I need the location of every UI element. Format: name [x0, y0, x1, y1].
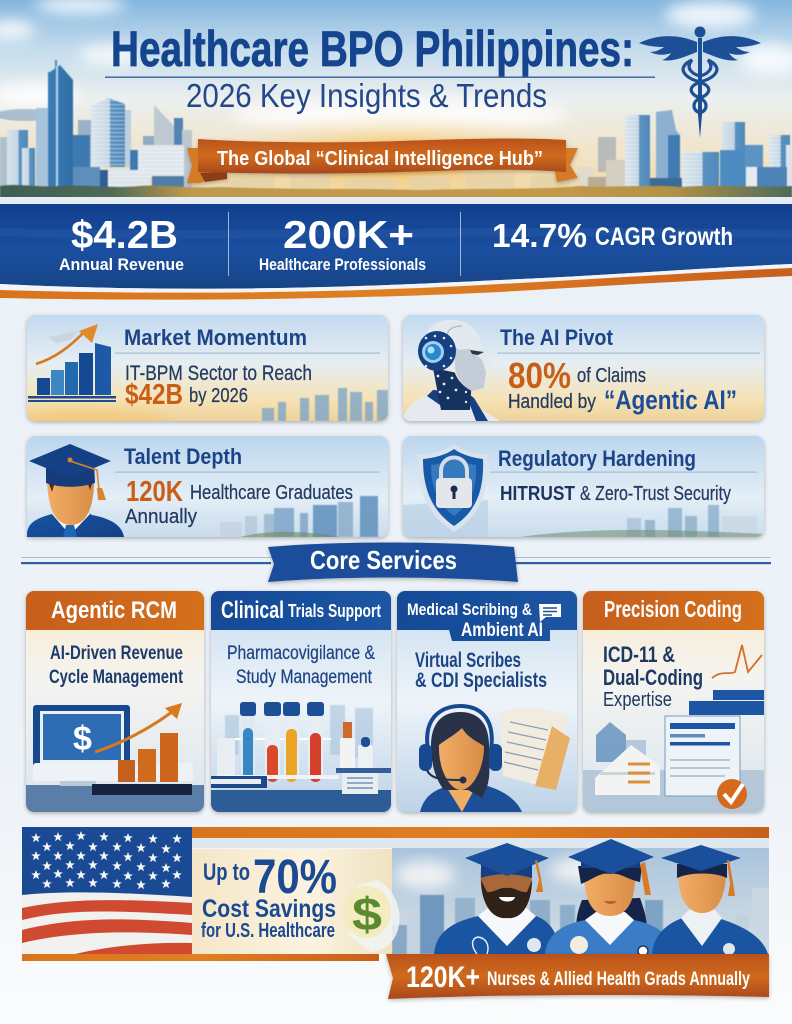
title divider: [105, 76, 655, 78]
stat: CAGR growth: 14.7%: [492, 217, 587, 254]
ribbon: nurses and allied health grads: 120K+: [406, 961, 480, 994]
panel: regulatory hardening: [403, 436, 764, 537]
stat: healthcare professionals: Healthcare Professionals: [259, 256, 426, 274]
card header: [26, 591, 204, 630]
text: cost savings: Up to: [203, 859, 250, 886]
illustration: scribe with headset: [419, 706, 570, 812]
stat: healthcare professionals: 200K+: [283, 214, 414, 257]
card text: [49, 643, 184, 688]
stat: CAGR growth: CAGR Growth: [595, 223, 733, 251]
tree line: [0, 184, 792, 197]
text: sector value: IT-BPM Sector to Reach: [125, 362, 312, 385]
stat: annual revenue: $4.2B: [71, 214, 178, 257]
right skyline: [578, 110, 792, 192]
icon: shield with lock: [418, 444, 487, 532]
card text: [227, 643, 375, 688]
icon: dollar coin: [343, 880, 400, 952]
text: healthcare graduates: [125, 476, 353, 528]
service card: medical scribing and ambient AI: Medical Scribing &: [407, 600, 532, 619]
card text: Virtual Scribes: [415, 649, 521, 672]
text: sector value: [125, 362, 312, 411]
text: cost savings: 70%: [253, 851, 337, 904]
icon: dollar coin: $: [352, 888, 382, 940]
card header: [583, 591, 764, 630]
text: security: & Zero-Trust Security: [580, 483, 731, 505]
text: claims handled by agentic AI: of Claims: [577, 365, 646, 387]
ribbon text: The Global “Clinical Intelligence Hub”: [217, 148, 543, 170]
card text: Cycle Management: [49, 667, 184, 688]
heading: Regulatory Hardening: [498, 446, 696, 471]
illustration: monitor and growth chart: $: [73, 720, 92, 758]
figure: graduate man: [652, 845, 768, 955]
card header: [397, 591, 577, 641]
card text: Study Management: [236, 667, 373, 688]
text: cost savings: Cost Savings: [202, 895, 336, 923]
stats band: [0, 204, 792, 300]
panel: market momentum: [24, 314, 390, 425]
service card: medical scribing and ambient AI: Ambient AI: [461, 620, 543, 641]
service card: medical scribing and ambient AI: [397, 591, 577, 812]
figure: graduate woman: [545, 839, 662, 954]
title: Healthcare BPO Philippines:: [111, 21, 634, 77]
card text: Dual-Coding: [603, 665, 703, 690]
service card: agentic RCM: [26, 591, 204, 812]
stat: healthcare professionals: [259, 214, 426, 274]
service card: clinical trials support: Clinical: [221, 597, 284, 624]
text: sector value: $42B: [125, 379, 183, 411]
card text: Pharmacovigilance &: [227, 643, 375, 664]
stat: annual revenue: Annual Revenue: [59, 256, 184, 274]
heading ribbon: core services: [268, 542, 518, 582]
ribbon: nurses and allied health grads: [386, 954, 769, 999]
stat: annual revenue: [59, 214, 184, 274]
text: claims handled by agentic AI: 80%: [508, 355, 571, 396]
text: claims handled by agentic AI: [508, 355, 737, 415]
figure: graduate man with beard: [434, 843, 560, 954]
heading: Market Momentum: [124, 325, 307, 350]
header: sky and city skyline: [0, 0, 792, 208]
panel: talent depth: [27, 436, 388, 537]
text: claims handled by agentic AI: “Agentic AI”: [604, 385, 737, 415]
hazy centre buildings: [225, 172, 570, 190]
text: cost savings: [201, 851, 337, 942]
card text: [415, 649, 547, 692]
card text: & CDI Specialists: [415, 669, 547, 692]
subtitle: 2026 Key Insights & Trends: [186, 77, 547, 114]
orange bottom stripe: [22, 954, 379, 961]
text: healthcare graduates: Healthcare Graduates: [190, 482, 353, 504]
text: healthcare graduates: Annually: [125, 506, 197, 528]
text: security: HITRUST: [500, 483, 575, 505]
illustration: monitor and growth chart: [26, 703, 204, 812]
icon: graduate: [27, 444, 124, 537]
icon: robot head: [403, 320, 500, 421]
text: healthcare graduates: 120K: [126, 476, 183, 508]
header bottom rule: [0, 197, 792, 204]
card text: AI-Driven Revenue: [50, 643, 183, 664]
icon: rising bar chart: [28, 324, 116, 402]
heading: Talent Depth: [124, 444, 242, 469]
icon: caduceus: [639, 26, 761, 138]
panel: the AI pivot: [403, 315, 764, 421]
heading: The AI Pivot: [500, 325, 614, 350]
left skyline: [0, 60, 192, 190]
service card: clinical trials support: Trials Support: [288, 601, 381, 621]
card text: [603, 642, 703, 711]
text: claims handled by agentic AI: Handled by: [508, 391, 596, 413]
illustration: coding documents: [583, 645, 764, 812]
panel: cost savings: [192, 849, 392, 954]
section divider lines: [21, 557, 771, 564]
icon: US flag: [22, 827, 192, 954]
service card: clinical trials support: [211, 591, 391, 812]
card text: Expertise: [603, 689, 672, 711]
card header: [211, 591, 391, 630]
heading ribbon: core services: Core Services: [310, 545, 457, 575]
ribbon: Clinical Intelligence Hub: [187, 138, 578, 183]
text: sector value: by 2026: [189, 385, 248, 407]
service card: precision coding: Precision Coding: [604, 596, 742, 622]
service card: precision coding: [583, 591, 764, 812]
text: security: [500, 483, 731, 505]
band behind banner: [192, 838, 769, 848]
service card: agentic RCM: Agentic RCM: [51, 597, 177, 624]
icon: chat note: [539, 604, 561, 622]
panel: graduates and city: [392, 839, 769, 956]
orange top stripe: [192, 827, 769, 838]
stat: CAGR growth: [492, 217, 733, 254]
illustration: test tubes: [211, 702, 391, 812]
card text: ICD-11 &: [603, 642, 675, 667]
text: cost savings: for U.S. Healthcare: [201, 920, 335, 942]
